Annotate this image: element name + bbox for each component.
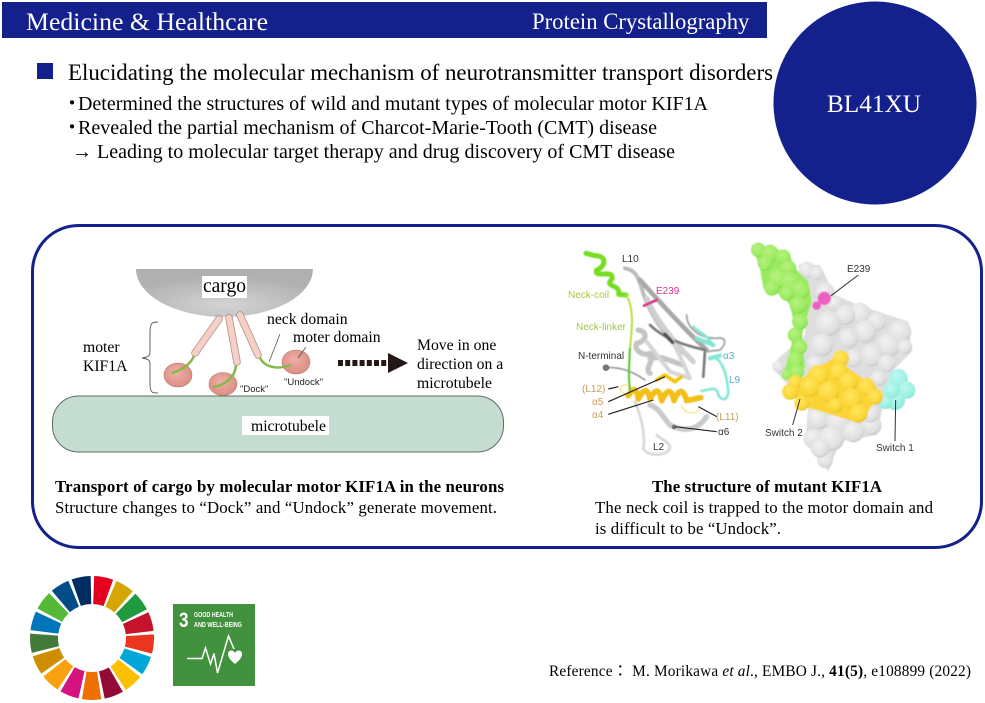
stalks [195, 315, 258, 362]
header: technique name: Protein Crystallography [532, 9, 750, 34]
header bar [2, 2, 767, 38]
yellow helices [620, 385, 700, 413]
surface labels: Switch 1 [876, 443, 914, 454]
direction arrow [338, 353, 408, 373]
cargo label [202, 276, 247, 298]
beamline badge [774, 2, 976, 204]
ribbon labels [568, 254, 741, 453]
leader lines [269, 334, 306, 362]
ribbon labels: L10 [622, 254, 639, 265]
leader lines [608, 377, 717, 432]
pink residue [812, 292, 831, 310]
SDG goal 3 icon [173, 604, 255, 686]
reference: Reference： M. Morikawa et al., EMBO J., 41(5), e108899 (2022) [549, 663, 971, 680]
diagram: cargo transport by KIF1A: "Undock" [284, 377, 323, 388]
diagram: cargo transport by KIF1A: microtubele [251, 418, 326, 435]
surface labels: E239 [847, 264, 871, 275]
leader lines [793, 275, 896, 441]
icon: heart [228, 650, 242, 664]
ribbon labels: α3 [723, 351, 735, 362]
beamline badge: BL41XU [827, 90, 921, 118]
left caption: Structure changes to “Dock” and “Undock” generate movement. [55, 498, 497, 517]
SDG goal 3 icon: GOOD HEALTH [194, 610, 233, 619]
ribbon labels: α6 [718, 427, 730, 438]
diagram labels: KIF1A [83, 358, 128, 375]
left caption [55, 477, 504, 517]
N-terminal ball [603, 364, 609, 371]
ribbon labels: Neck-linker [576, 322, 627, 333]
ribbon model of KIF1A [568, 253, 741, 455]
microtubule label [242, 416, 329, 435]
summary points: Revealed the partial mechanism of Charcot-Marie-Tooth (CMT) disease [78, 117, 657, 139]
surface labels: Switch 2 [765, 428, 803, 439]
summary points: ・ [62, 93, 82, 115]
diagram: cargo transport by KIF1A: "Dock" [240, 384, 268, 395]
right caption [595, 477, 934, 538]
right caption: The structure of mutant KIF1A [652, 477, 882, 496]
right caption: is difficult to be “Undock”. [595, 519, 781, 538]
cyan surface [878, 369, 915, 410]
ribbon labels: E239 [656, 286, 680, 297]
microtubule [52, 396, 504, 452]
diagram labels: moter domain [293, 329, 381, 346]
neck linkers [172, 356, 291, 387]
ribbon labels: Neck-coil [568, 290, 609, 301]
gray ribbons [625, 268, 683, 353]
SDG colour wheel [24, 570, 160, 703]
right caption: The neck coil is trapped to the motor domain and [595, 498, 934, 517]
cargo [136, 269, 313, 317]
diagram labels: microtubele [417, 375, 492, 392]
summary points: Determined the structures of wild and mutant types of molecular motor KIF1A [78, 93, 709, 115]
icon: heartbeat [187, 636, 234, 673]
left caption: Transport of cargo by molecular motor KIF1A in the neurons [55, 477, 504, 496]
SDG goal 3 icon: AND WELL-BEING [194, 620, 242, 629]
yellow surface [782, 350, 883, 423]
surface labels [765, 264, 914, 454]
motor heads [164, 363, 192, 387]
diagram labels: direction on a [417, 356, 503, 373]
diagram labels: moter [83, 339, 120, 356]
summary points [62, 93, 709, 163]
main rounded panel [32, 226, 982, 548]
ribbon labels: L9 [729, 375, 741, 386]
E239 residue [644, 300, 657, 306]
ribbon labels: (L12) [582, 384, 605, 395]
diagram: cargo transport by KIF1A [52, 269, 504, 452]
gray surface [772, 262, 912, 472]
bracket [142, 322, 158, 393]
ribbon labels: α5 [592, 397, 604, 408]
summary points: → [72, 141, 92, 163]
green neck surface [751, 243, 812, 380]
diagram labels [83, 311, 503, 392]
surface model of KIF1A [751, 243, 915, 472]
ribbon labels: L2 [653, 442, 665, 453]
summary points: Leading to molecular target therapy and drug discovery of CMT disease [97, 141, 675, 163]
diagram labels: Move in one [417, 337, 496, 354]
ribbon labels: α4 [592, 410, 604, 421]
ribbon labels: (L11) [716, 412, 739, 423]
heading with square bullet: Elucidating the molecular mechanism of neurotransmitter transport disorders [68, 60, 773, 85]
summary points: ・ [62, 117, 82, 139]
green neck coil and linker [586, 253, 626, 295]
diagram labels: neck domain [267, 311, 348, 328]
SDG goal 3 icon: 3 [179, 609, 188, 632]
diagram: cargo transport by KIF1A: cargo [203, 276, 246, 297]
cyan loop [693, 327, 728, 399]
header: field name: Medicine & Healthcare [26, 7, 268, 36]
ribbon labels: N-terminal [578, 351, 624, 362]
